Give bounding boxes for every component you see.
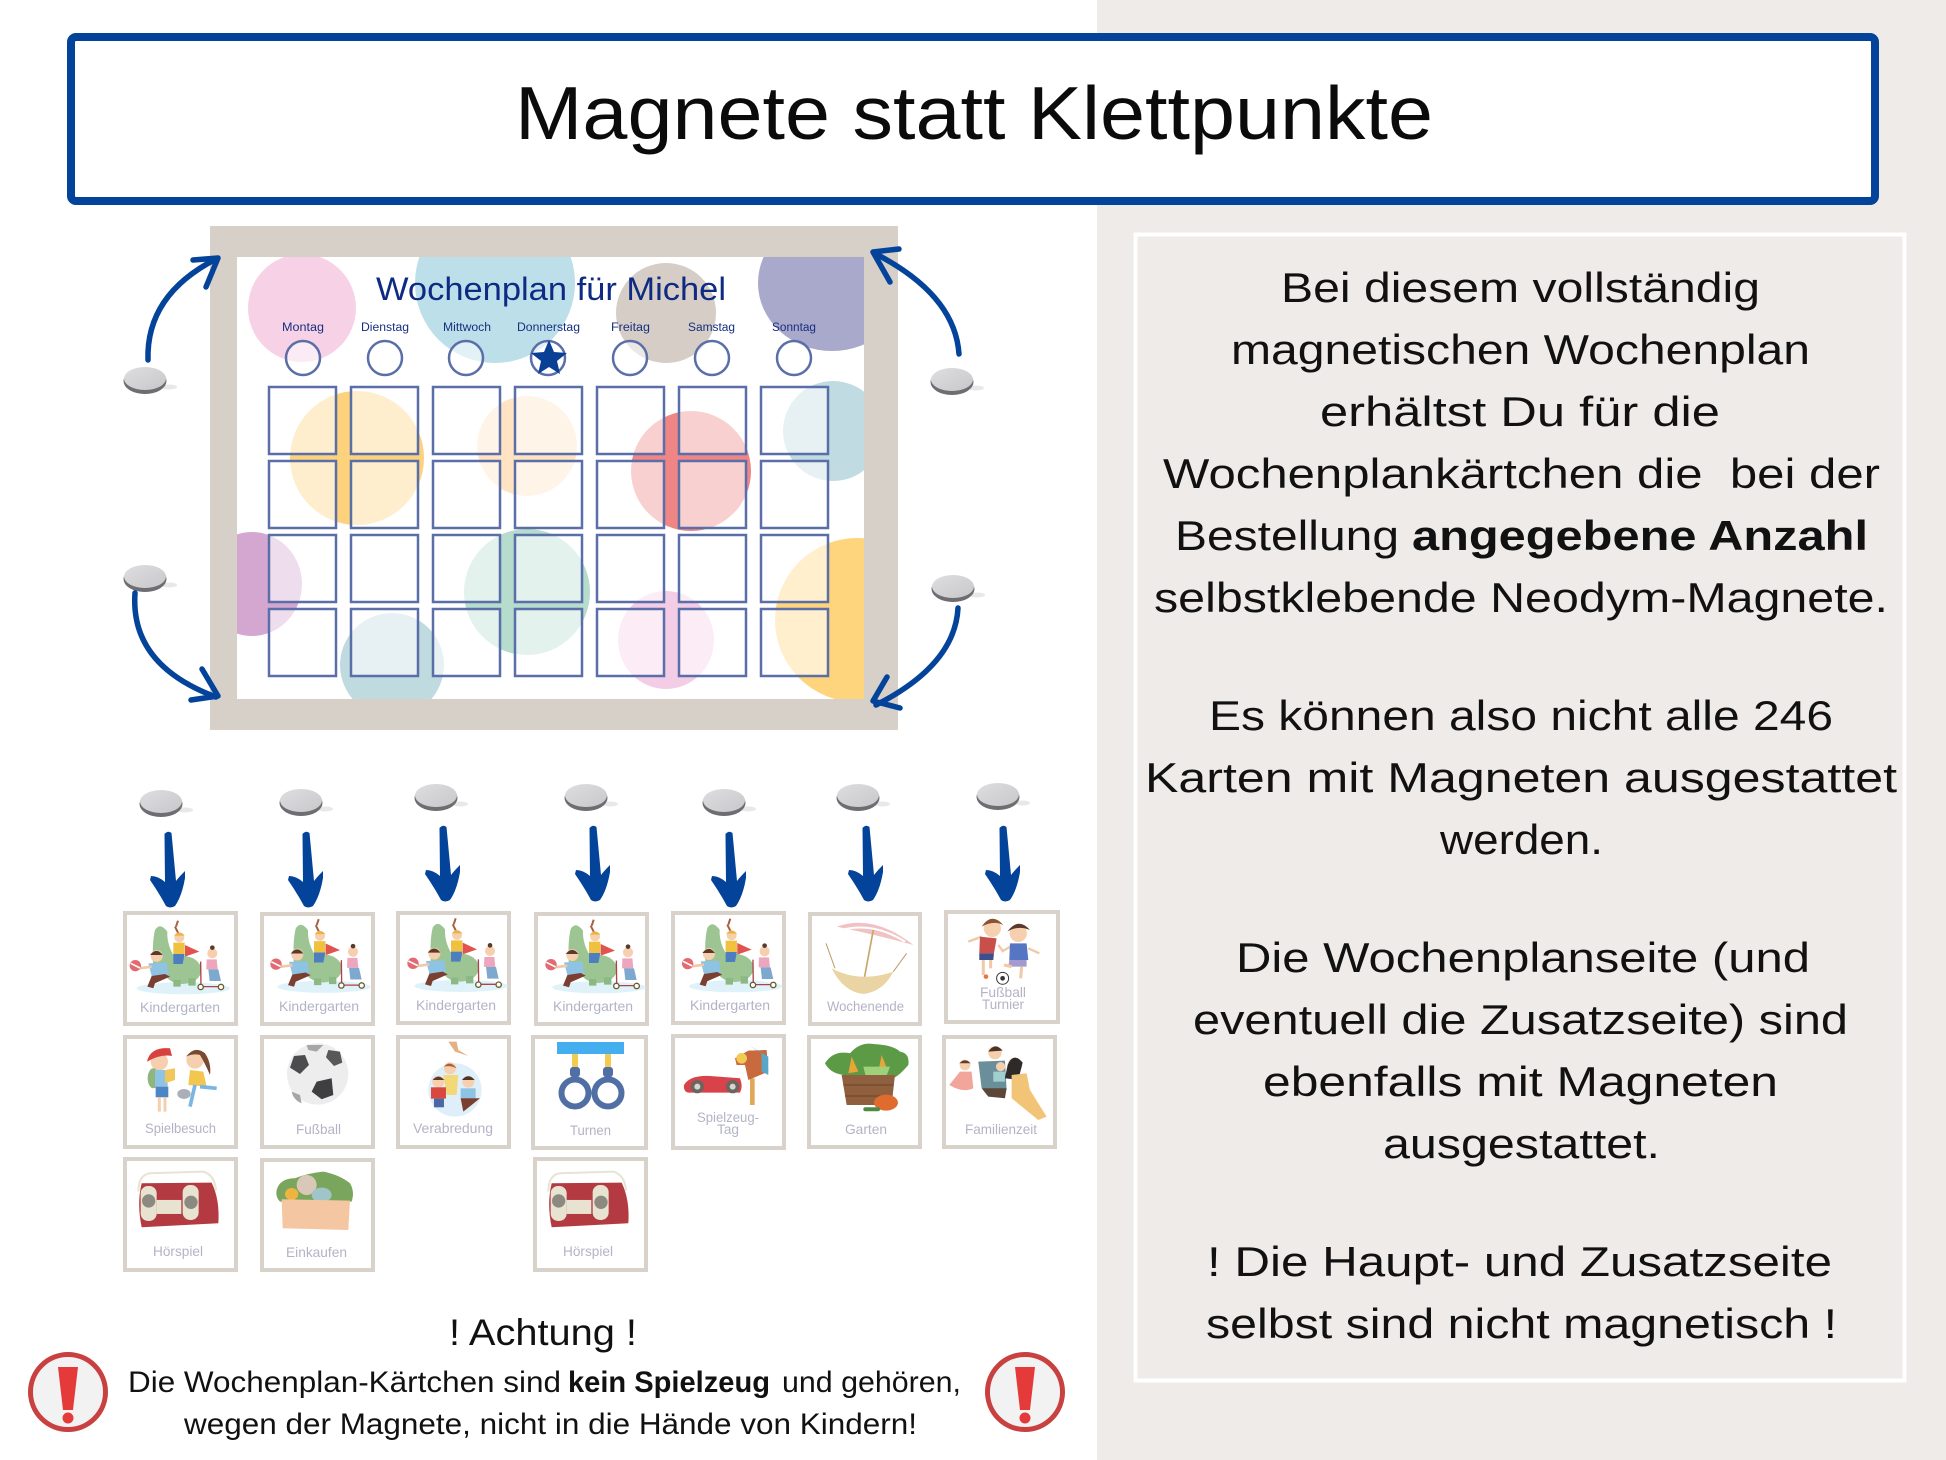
paragraph 3: [1193, 934, 1848, 1167]
corner magnets: [124, 367, 985, 602]
card: Kindergarten 2: [262, 914, 373, 1024]
title banner: [71, 37, 1875, 201]
card: Garten: [809, 1037, 920, 1147]
right column background: [1097, 0, 1946, 1460]
card: Familienzeit: Familienzeit: [965, 1121, 1037, 1137]
weekday labels: Freitag: [611, 322, 650, 334]
warning text: und gehören,: [782, 1366, 961, 1399]
card: Spielzeug-Tag: [673, 1036, 784, 1148]
panel: weekly plan board: [210, 226, 898, 730]
weekday labels: Mittwoch: [443, 322, 491, 334]
plan title: Wochenplan für Michel: [376, 271, 726, 307]
card: Fußball: Fußball: [296, 1121, 341, 1137]
weekday labels: Samstag: [688, 322, 735, 334]
empty card slots: [269, 387, 828, 676]
icon: warning left: [30, 1354, 106, 1430]
card: Hörspiel 2: [535, 1159, 646, 1270]
card: Verabredung: [398, 1037, 509, 1147]
card: Fußball Turnier: Fußball: [980, 984, 1026, 1000]
card: Turnen: Turnen: [570, 1122, 611, 1138]
warning block: [30, 1312, 1062, 1441]
card: Fußball: [262, 1037, 373, 1147]
day circles: [286, 341, 811, 375]
card: Kindergarten 1: [125, 913, 236, 1024]
card: Spielbesuch: Spielbesuch: [145, 1120, 216, 1136]
paragraph 1: Bei diesem vollständig: [1281, 264, 1760, 311]
row of magnets above cards: [140, 783, 1030, 817]
warning text: [128, 1366, 961, 1441]
paragraph 1: selbstklebende Neodym-Magnete.: [1154, 574, 1888, 621]
paragraph 1: angegebene Anzahl: [1412, 512, 1868, 559]
paragraph 1: erhältst Du für die: [1320, 388, 1720, 435]
card: Spielzeug-Tag: Tag: [717, 1121, 739, 1137]
card: Wochenende: [810, 914, 920, 1024]
icon: warning right: [988, 1354, 1062, 1430]
paragraph 3: eventuell die Zusatzseite) sind: [1193, 996, 1848, 1043]
card: Hörspiel 2: Hörspiel: [563, 1243, 613, 1259]
icon: star: [531, 340, 567, 374]
weekday labels: Donnerstag: [517, 322, 580, 334]
arrows: magnets to board corners: [135, 249, 959, 708]
card: Spielbesuch: [125, 1037, 236, 1147]
paragraph 3: Die Wochenplanseite (und: [1236, 934, 1810, 981]
paragraph 4: ! Die Haupt- und Zusatzseite: [1207, 1238, 1832, 1285]
card: Wochenende: Wochenende: [827, 998, 904, 1014]
panel: explanation text: [1136, 234, 1904, 1380]
card: Kindergarten 5: [673, 913, 784, 1023]
card: Hörspiel 1: Hörspiel: [153, 1243, 203, 1259]
card: Einkaufen: [262, 1160, 373, 1270]
card: Hörspiel 1: [125, 1159, 236, 1270]
paragraph 1: [1154, 264, 1888, 621]
warning heading: ! Achtung !: [449, 1312, 637, 1353]
paragraph 1: Wochenplankärtchen die bei der: [1163, 450, 1880, 497]
weekday labels: Sonntag: [772, 322, 816, 334]
card: Kindergarten 4: Kindergarten: [553, 998, 633, 1014]
paragraph 2: Es können also nicht alle 246: [1209, 692, 1833, 739]
paragraph 2: Karten mit Magneten ausgestattet: [1145, 754, 1897, 801]
paragraph 3: ausgestattet.: [1383, 1120, 1660, 1167]
card: Spielzeug-Tag: Spielzeug-: [697, 1109, 759, 1125]
card: Verabredung: Verabredung: [413, 1120, 493, 1136]
paragraph 3: ebenfalls mit Magneten: [1263, 1058, 1778, 1105]
warning text: wegen der Magnete, nicht in die Hände von Kindern!: [183, 1408, 917, 1441]
card: Kindergarten 5: Kindergarten: [690, 997, 770, 1013]
weekday labels: [282, 322, 816, 334]
card: Einkaufen: Einkaufen: [286, 1244, 347, 1260]
paragraph 4: [1206, 1238, 1837, 1347]
paragraph 2: [1145, 692, 1897, 863]
card: Kindergarten 1: Kindergarten: [140, 999, 220, 1015]
paragraph 1: magnetischen Wochenplan: [1231, 326, 1810, 373]
weekday labels: Dienstag: [361, 322, 409, 334]
card: Fußball Turnier: Turnier: [982, 996, 1024, 1012]
paragraph 1: Bestellung: [1175, 512, 1399, 559]
warning text: kein Spielzeug: [568, 1366, 770, 1399]
card: Fußball Turnier: [946, 912, 1058, 1022]
card: Familienzeit: [944, 1037, 1055, 1147]
paragraph 2: werden.: [1439, 816, 1603, 863]
paragraph 4: selbst sind nicht magnetisch !: [1206, 1300, 1837, 1347]
title banner: Magnete statt Klettpunkte: [515, 71, 1433, 155]
card: Garten: Garten: [845, 1121, 887, 1137]
card: Kindergarten 2: Kindergarten: [279, 998, 359, 1014]
card: Turnen: [533, 1037, 646, 1148]
card: Kindergarten 3: Kindergarten: [416, 997, 496, 1013]
weekday labels: Montag: [282, 322, 324, 334]
warning text: Die Wochenplan-Kärtchen sind: [128, 1366, 561, 1399]
down arrows: [150, 826, 1020, 908]
card: Kindergarten 3: [398, 913, 509, 1023]
card: Kindergarten 4: [536, 914, 647, 1024]
